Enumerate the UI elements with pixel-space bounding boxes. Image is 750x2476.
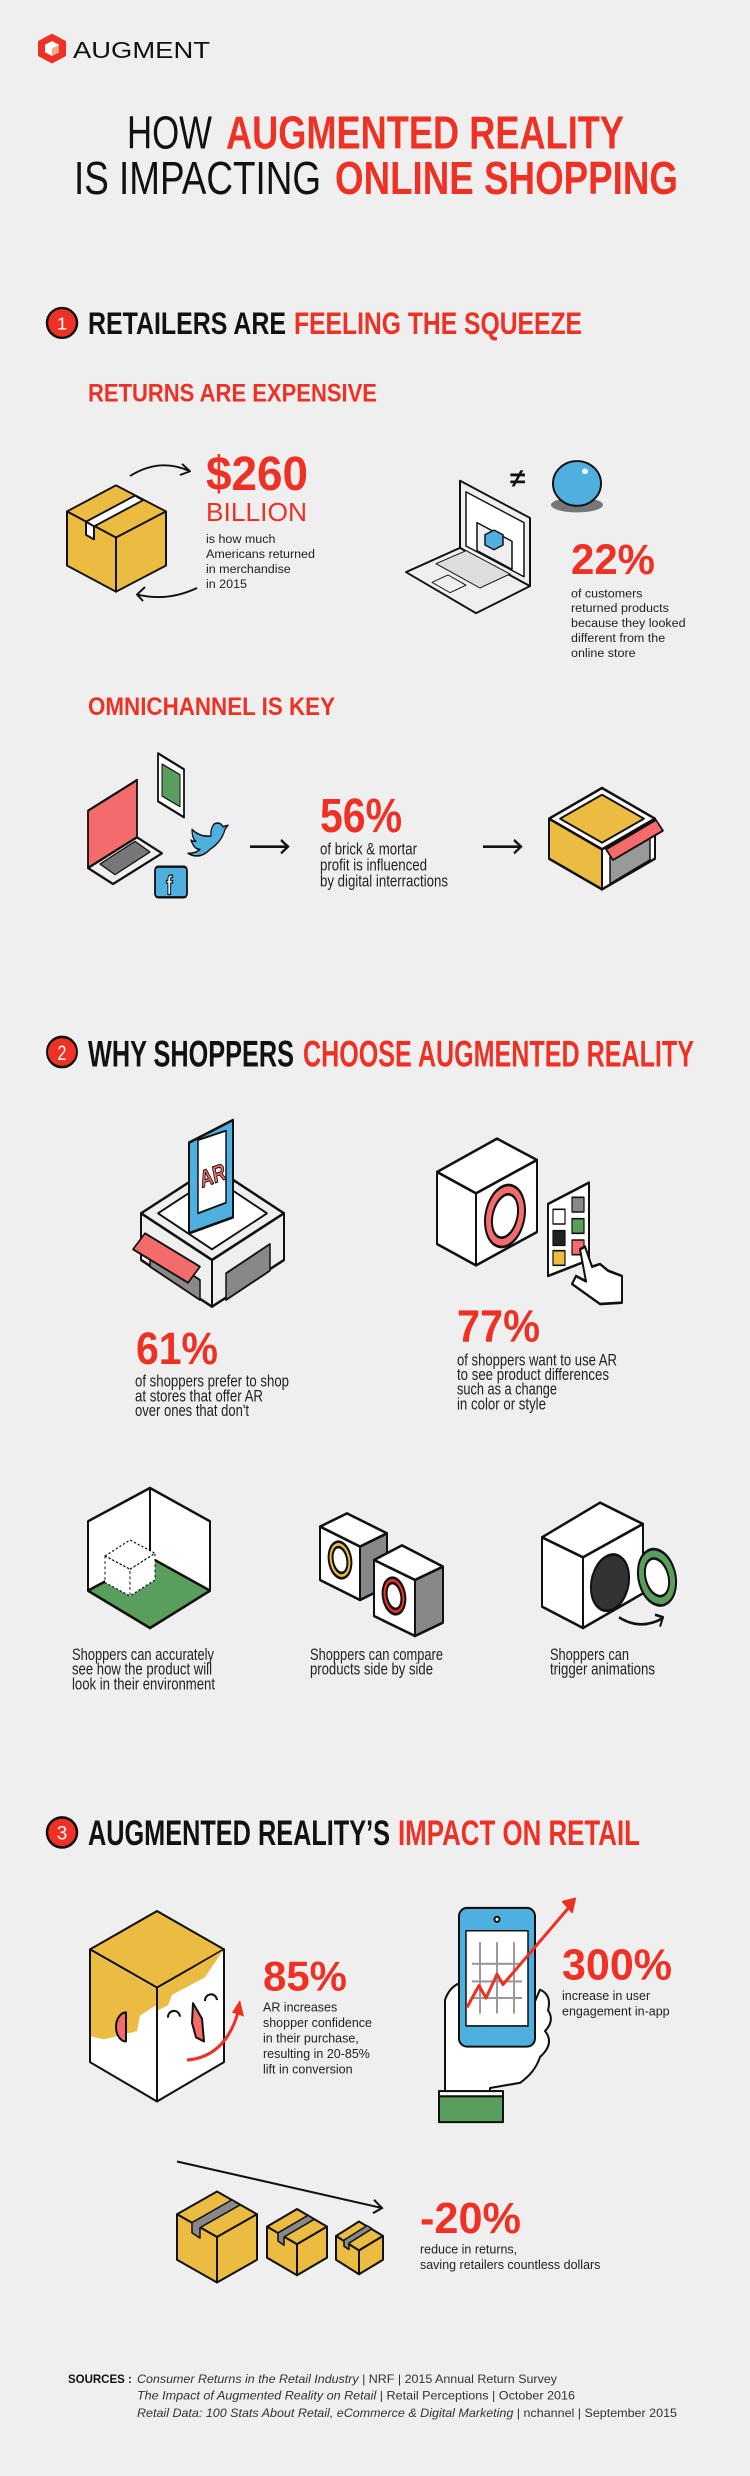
section 1 heading: 1	[57, 313, 67, 333]
text: animations: Shoppers can	[550, 1646, 629, 1665]
stat: 61%: over ones that don't	[135, 1402, 249, 1421]
arrow: decline	[177, 2161, 382, 2213]
sources	[68, 2373, 678, 2420]
section 2 heading: CHOOSE AUGMENTED REALITY	[303, 1033, 694, 1075]
stat: 300%: engagement in-app	[562, 2003, 670, 2019]
stat: 22%: online store	[571, 646, 636, 660]
text: compare: products side by side	[310, 1661, 433, 1679]
stat: 56%: of brick & mortar	[320, 841, 417, 859]
stat: 77%	[457, 1302, 617, 1414]
stat: 22%: returned products	[571, 602, 669, 615]
stat: $260 billion: in merchandise	[206, 562, 291, 576]
text: environment	[72, 1646, 215, 1694]
stat: 22%: of customers	[571, 587, 642, 600]
title: HOW	[127, 107, 212, 159]
icon: laptop vs real product	[406, 461, 603, 613]
stat: 77%: such as a change	[457, 1381, 557, 1399]
stat: 56%: 56%	[320, 789, 402, 842]
title	[74, 107, 678, 205]
stat: 77%: in color or style	[457, 1396, 546, 1414]
stat: 85%: in their purchase,	[263, 2030, 359, 2046]
icon: washer animation	[542, 1503, 684, 1628]
section 1 heading: FEELING THE SQUEEZE	[294, 305, 582, 341]
icon: devices: f	[166, 871, 173, 900]
icon: box with return arrows	[67, 464, 197, 601]
text: compare	[310, 1646, 443, 1679]
stat: -20%: -20%	[420, 2194, 521, 2243]
stat: 300%	[562, 1941, 672, 2019]
sources: Retail Data: 100 Stats About Retail, eCommerce & Digital Marketing | nchannel | September 2015	[137, 2407, 678, 2420]
section 3 heading: 3	[57, 1823, 67, 1845]
icon: two washers	[320, 1513, 443, 1636]
stat: -20%	[420, 2194, 600, 2272]
stat: $260 billion: BILLION	[206, 497, 307, 527]
stat: 85%: 85%	[263, 1953, 347, 2000]
subheading: omnichannel is key: OMNICHANNEL IS KEY	[88, 692, 335, 721]
section 2 heading: WHY SHOPPERS	[88, 1033, 294, 1075]
stat: 85%	[263, 1953, 372, 2077]
panel: section 3	[47, 1814, 678, 2420]
icon: store with AR phone: AR	[198, 1159, 228, 1193]
stat: 56%: profit is influenced	[320, 857, 427, 875]
title: IS IMPACTING	[74, 153, 321, 205]
stat: 77%: 77%	[457, 1302, 540, 1352]
section 2 heading: 2	[58, 1041, 66, 1065]
stat: $260 billion: in 2015	[206, 577, 247, 591]
stat: 56%	[320, 789, 448, 891]
stat: 22%: because they looked	[571, 617, 686, 630]
stat: $260 billion: $260	[206, 446, 308, 501]
text: environment: look in their environment	[72, 1676, 215, 1694]
text: environment: see how the product will	[72, 1661, 212, 1679]
sources: The Impact of Augmented Reality on Retail | Retail Perceptions | October 2016	[137, 2389, 575, 2402]
section 1 heading	[47, 305, 582, 341]
section 1 heading: RETAILERS ARE	[88, 305, 286, 341]
stat: 300%: 300%	[562, 1941, 672, 1990]
panel: omnichannel and section 2	[47, 753, 694, 1694]
stat: 300%: increase in user	[562, 1988, 651, 2003]
icon: laptop vs real product: ≠	[510, 463, 526, 493]
icon: store with AR phone	[133, 1120, 284, 1307]
stat: $260 billion: Americans returned	[206, 547, 315, 561]
stat: 22%: different from the	[571, 631, 665, 645]
section 3 heading: IMPACT ON RETAIL	[398, 1814, 640, 1853]
stat: 61%: of shoppers prefer to shop	[135, 1373, 289, 1391]
section 3 heading	[47, 1814, 640, 1853]
icon: store	[549, 788, 663, 889]
stat: $260 billion	[206, 446, 315, 591]
logo: AUGMENT	[73, 38, 210, 64]
text: environment: Shoppers can accurately	[72, 1646, 215, 1665]
stat: 22%: 22%	[571, 536, 655, 584]
arrow	[483, 840, 521, 853]
stat: 56%: by digital interractions	[320, 873, 448, 891]
icon: room with product	[88, 1488, 210, 1628]
arrow	[250, 840, 288, 853]
stat: 85%: shopper confidence	[263, 2015, 372, 2030]
stat: 77%: to see product differences	[457, 1366, 609, 1385]
panel: header and section 1	[38, 34, 686, 721]
subheading: returns are expensive: RETURNS ARE EXPENSIVE	[88, 378, 377, 407]
logo	[38, 34, 210, 64]
stat: 61%: 61%	[136, 1324, 218, 1374]
text: animations	[550, 1646, 655, 1679]
icon: devices	[88, 753, 228, 900]
icon: washer with color picker	[437, 1139, 622, 1304]
stat: 85%: lift in conversion	[263, 2061, 353, 2077]
section 2 heading	[47, 1033, 694, 1075]
text: compare: Shoppers can compare	[310, 1646, 443, 1665]
icon: happy cube	[90, 1911, 244, 2101]
text: animations: trigger animations	[550, 1661, 655, 1679]
sources: SOURCES :	[68, 2373, 132, 2386]
stat: -20%: reduce in returns,	[420, 2241, 517, 2257]
stat: $260 billion: is how much	[206, 533, 275, 546]
icon: shrinking boxes	[177, 2191, 383, 2283]
section 3 heading: AUGMENTED REALITY’S	[88, 1814, 390, 1853]
sources: Consumer Returns in the Retail Industry | NRF | 2015 Annual Return Survey	[137, 2373, 557, 2386]
stat: 77%: of shoppers want to use AR	[457, 1352, 617, 1370]
stat: -20%: saving retailers countless dollars	[420, 2257, 600, 2272]
stat: 22%	[571, 536, 686, 660]
icon: hand holding phone with growth arrow	[439, 1899, 575, 2122]
stat: 85%: resulting in 20-85%	[263, 2046, 370, 2061]
stat: 61%	[135, 1324, 289, 1421]
stat: 85%: AR increases	[263, 1999, 337, 2014]
stat: 61%: at stores that offer AR	[135, 1388, 263, 1406]
